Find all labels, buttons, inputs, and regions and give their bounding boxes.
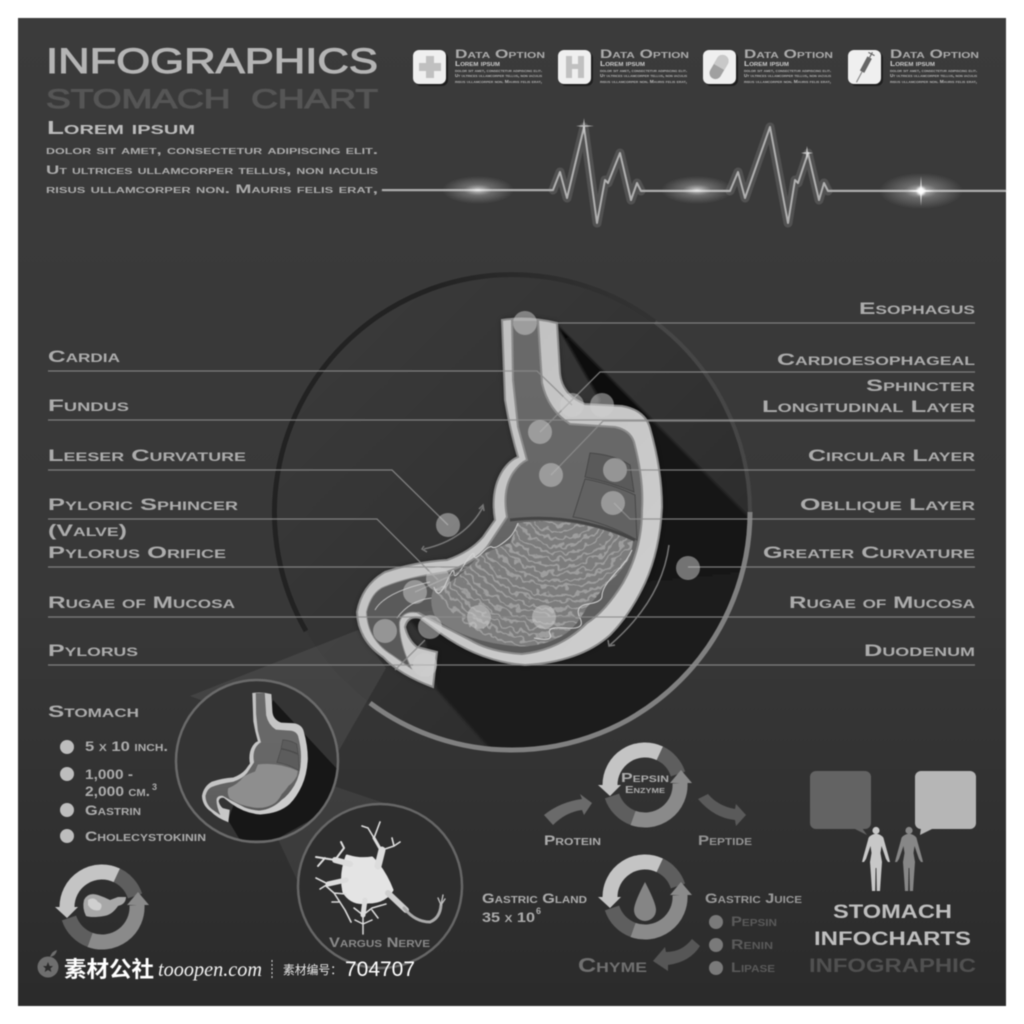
data option 2: Data Option (600, 49, 689, 61)
left labels: Pylorus Orifice (48, 543, 226, 562)
right labels: Duodenum (864, 641, 975, 660)
data option 4 (848, 49, 979, 86)
arrow: peptide (698, 794, 746, 826)
label: chyme: Chyme (578, 955, 647, 977)
label: peptide: Peptide (698, 832, 752, 848)
cycle: pepsin enzyme: Enzyme (625, 785, 665, 796)
left labels: (Valve) (48, 521, 127, 540)
stomach facts: 3 (152, 782, 157, 792)
cycle: food (55, 872, 149, 942)
data option 2: Lorem ipsum (600, 61, 645, 68)
icon: pill (707, 53, 731, 81)
intro paragraph: dolor sit amet, consectetur adipiscing elit. (46, 143, 378, 157)
marker dots (373, 311, 700, 677)
long shadow (410, 325, 760, 760)
data option 4: Lorem ipsum (890, 61, 935, 68)
speech bubble: dark (810, 771, 871, 835)
stomach infocharts title: INFOCHARTS (814, 929, 971, 950)
cycle: gastric drop (598, 862, 692, 932)
intro paragraph: risus ullamcorper non. Mauris felis erat, (46, 182, 378, 196)
data option 1 (413, 49, 545, 86)
pylorus interior (367, 575, 440, 667)
stomach facts: 2,000 cm. (85, 783, 150, 799)
data option 3: Data Option (744, 49, 833, 61)
inset circle: small stomach (176, 680, 338, 842)
left labels: Fundus (48, 396, 129, 415)
label: gastric gland: 6 (536, 906, 541, 916)
heartbeat line (382, 118, 1006, 223)
person: woman (862, 827, 890, 891)
oblique layer (573, 479, 637, 540)
label: gastric gland: Gastric Gland (482, 890, 587, 906)
right labels: Rugae of Mucosa (789, 593, 975, 612)
data option 4: Data Option (890, 49, 979, 61)
data option 3 (703, 49, 833, 86)
stomach facts: Cholecystokinin (85, 828, 206, 844)
icon: apple (38, 950, 58, 978)
watermark: 704707 (345, 958, 415, 981)
watermark: 素材编号： (283, 962, 342, 977)
data option 4: dolor sit amet, consectetur adipiscing elit. (890, 68, 977, 73)
right labels: Cardioesophageal (777, 350, 975, 369)
data option 2: Ut ultrices ullamcorper tellus, non iaculis (600, 73, 687, 78)
data option 3: risus ullamcorper non. Mauris felis erat, (744, 79, 831, 84)
left labels: Pylorus (48, 641, 138, 660)
left labels: Pyloric Sphincer (48, 495, 238, 514)
inset circle: vargus nerve (298, 804, 462, 968)
left labels (48, 347, 246, 660)
stomach infocharts title: STOMACH (833, 902, 952, 923)
intro heading: Lorem ipsum (47, 118, 195, 138)
watermark: tooopen.com (158, 957, 262, 981)
nerve caption: Vargus Nerve (329, 934, 430, 950)
curved arrow: lesser curvature (422, 505, 484, 552)
subtitle: stomach chart: STOMACH CHART (46, 84, 378, 114)
stomach infocharts title: INFOGRAPHIC (809, 956, 976, 977)
big circle (274, 274, 760, 760)
stomach facts: Gastrin (85, 802, 141, 818)
icon: H (566, 56, 584, 78)
cycle: pepsin enzyme (598, 750, 692, 820)
right labels (762, 299, 976, 660)
data option 1: Data Option (455, 49, 545, 61)
data option 3: dolor sit amet, consectetur adipiscing elit. (744, 68, 831, 73)
stomach facts: Stomach (48, 702, 139, 721)
data option 1: Lorem ipsum (455, 61, 500, 68)
band above rugae (510, 518, 635, 540)
right labels: Greater Curvature (763, 543, 975, 562)
left labels: Rugae of Mucosa (48, 593, 235, 612)
beam from stomach to inset circle (190, 630, 386, 752)
gastric juice list (705, 890, 802, 975)
data option 4: Ut ultrices ullamcorper tellus, non iaculis (890, 73, 977, 78)
data option 2: dolor sit amet, consectetur adipiscing elit. (600, 68, 687, 73)
intro paragraph (46, 143, 379, 196)
cycle: pepsin enzyme: Pepsin (621, 770, 669, 785)
data option 1: risus ullamcorper non. Mauris felis erat, (455, 79, 542, 84)
left labels: Cardia (48, 347, 120, 366)
right labels: Longitudinal Layer (762, 397, 975, 416)
data option 2: risus ullamcorper non. Mauris felis erat, (600, 79, 687, 84)
data option 2 (558, 49, 689, 86)
gastric juice list: Lipase (731, 959, 775, 975)
person: man (895, 827, 923, 891)
data option 3: Ut ultrices ullamcorper tellus, non iaculis (744, 73, 831, 78)
label: gastric gland (482, 890, 587, 925)
data option 3: Lorem ipsum (744, 61, 789, 68)
stomach infocharts title (809, 902, 976, 977)
right labels: Esophagus (859, 299, 975, 318)
icon: drop (634, 882, 656, 921)
neuron (316, 822, 445, 934)
stomach diagram (356, 317, 664, 689)
label: gastric gland: 35 x 10 (482, 909, 535, 925)
watermark: 素材公社 (64, 957, 154, 982)
icon: cross (419, 56, 441, 78)
right labels: Circular Layer (808, 446, 975, 465)
speech bubble: light (915, 771, 976, 835)
gastric juice list: Renin (731, 936, 773, 952)
stomach facts: 5 x 10 inch. (85, 738, 168, 754)
gastric juice list: Pepsin (731, 913, 777, 929)
circular layer (585, 453, 634, 492)
stomach facts (48, 702, 206, 844)
data option 1: Ut ultrices ullamcorper tellus, non iaculis (455, 73, 542, 78)
left labels: Leeser Curvature (48, 446, 246, 465)
right labels: Obllique Layer (800, 495, 976, 514)
gastric juice list: Gastric Juice (705, 890, 802, 906)
data option 4: risus ullamcorper non. Mauris felis erat, (890, 79, 977, 84)
right labels: Sphincter (866, 376, 975, 395)
beam from inset to nerve (270, 778, 387, 882)
stomach facts: 1,000 - (85, 766, 133, 782)
label: protein: Protein (544, 832, 601, 848)
arrow: protein (544, 794, 592, 825)
icon: syringe (853, 51, 876, 84)
rugae of mucosa (431, 520, 634, 647)
watermark (38, 950, 415, 982)
data option 1: dolor sit amet, consectetur adipiscing elit. (455, 68, 542, 73)
curved arrow: greater curvature (608, 545, 669, 646)
pointer lines (48, 323, 975, 670)
title: infographics: INFOGRAPHICS (46, 42, 378, 81)
intro paragraph: Ut ultrices ullamcorper tellus, non iaculis (46, 163, 379, 177)
arrow: chyme (653, 939, 700, 971)
